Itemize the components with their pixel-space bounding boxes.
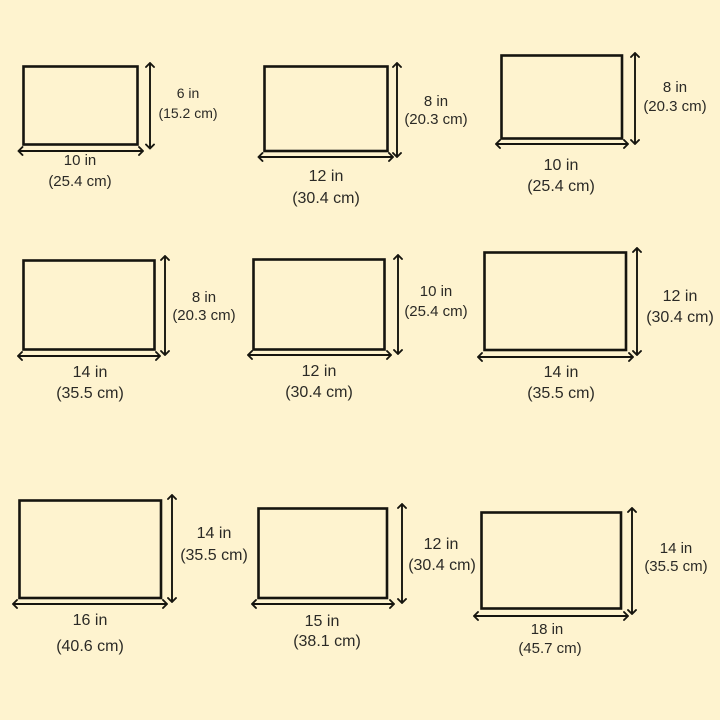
diagram: 10 x 6 in: (25.4 cm): [48, 173, 112, 190]
diagram: 14 x 12 in: [478, 248, 714, 402]
diagram: 12 x 8 in: 8 in: [424, 93, 448, 110]
diagram: 12 x 10 in: 12 in: [302, 363, 336, 380]
diagram: 10 x 6 in: [18, 63, 218, 190]
diagram: 15 x 12 in: [252, 504, 476, 650]
diagram: 18 x 14 in: (45.7 cm): [518, 640, 582, 657]
diagram: 12 x 8 in: [258, 63, 468, 207]
diagram: 10 x 6 in: 6 in: [177, 85, 199, 101]
diagram: 14 x 8 in: 8 in: [192, 289, 216, 306]
diagram: 16 x 14 in: (35.5 cm): [180, 547, 248, 564]
diagram: 14 x 12 in: 12 in: [663, 288, 697, 305]
diagram: 15 x 12 in: (38.1 cm): [293, 633, 361, 650]
diagram: 12 x 8 in: (30.4 cm): [292, 190, 360, 207]
diagram: 10 x 8 in: (25.4 cm): [527, 178, 595, 195]
diagram: 10 x 8 in: 10 in: [544, 157, 578, 174]
diagram: 16 x 14 in: [13, 495, 248, 655]
diagram: 18 x 14 in: 18 in: [531, 621, 563, 638]
diagram: 18 x 14 in: [474, 508, 708, 657]
diagram: 16 x 14 in: 16 in: [73, 612, 107, 629]
diagram: 10 x 6 in: (15.2 cm): [158, 105, 218, 121]
diagram: 12 x 8 in: (20.3 cm): [404, 111, 468, 128]
diagram: 10 x 8 in: (20.3 cm): [643, 98, 707, 115]
diagram: 16 x 14 in: 14 in: [197, 525, 231, 542]
diagram: 12 x 10 in: [248, 255, 468, 401]
diagram: 14 x 12 in: 14 in: [544, 364, 578, 381]
diagram: 12 x 10 in: (30.4 cm): [285, 384, 353, 401]
diagram: 14 x 8 in: (20.3 cm): [172, 307, 236, 324]
diagram: 12 x 8 in: 12 in: [309, 168, 343, 185]
diagram: 15 x 12 in: (30.4 cm): [408, 557, 476, 574]
diagram: 14 x 12 in: (30.4 cm): [646, 309, 714, 326]
diagram: 10 x 8 in: [496, 53, 707, 195]
diagram: 16 x 14 in: (40.6 cm): [56, 638, 124, 655]
diagram: 14 x 8 in: [18, 256, 236, 402]
diagram: 18 x 14 in: 14 in: [660, 540, 692, 557]
diagram: 15 x 12 in: 15 in: [305, 613, 339, 630]
diagram: 15 x 12 in: 12 in: [424, 536, 458, 553]
diagram: 10 x 8 in: 8 in: [663, 79, 687, 96]
diagram: 12 x 10 in: 10 in: [420, 283, 452, 300]
diagram: 18 x 14 in: (35.5 cm): [644, 558, 708, 575]
diagram: 14 x 12 in: (35.5 cm): [527, 385, 595, 402]
diagram: 12 x 10 in: (25.4 cm): [404, 303, 468, 320]
diagram: 10 x 6 in: 10 in: [64, 152, 96, 169]
diagram: 14 x 8 in: (35.5 cm): [56, 385, 124, 402]
diagram: 14 x 8 in: 14 in: [73, 364, 107, 381]
